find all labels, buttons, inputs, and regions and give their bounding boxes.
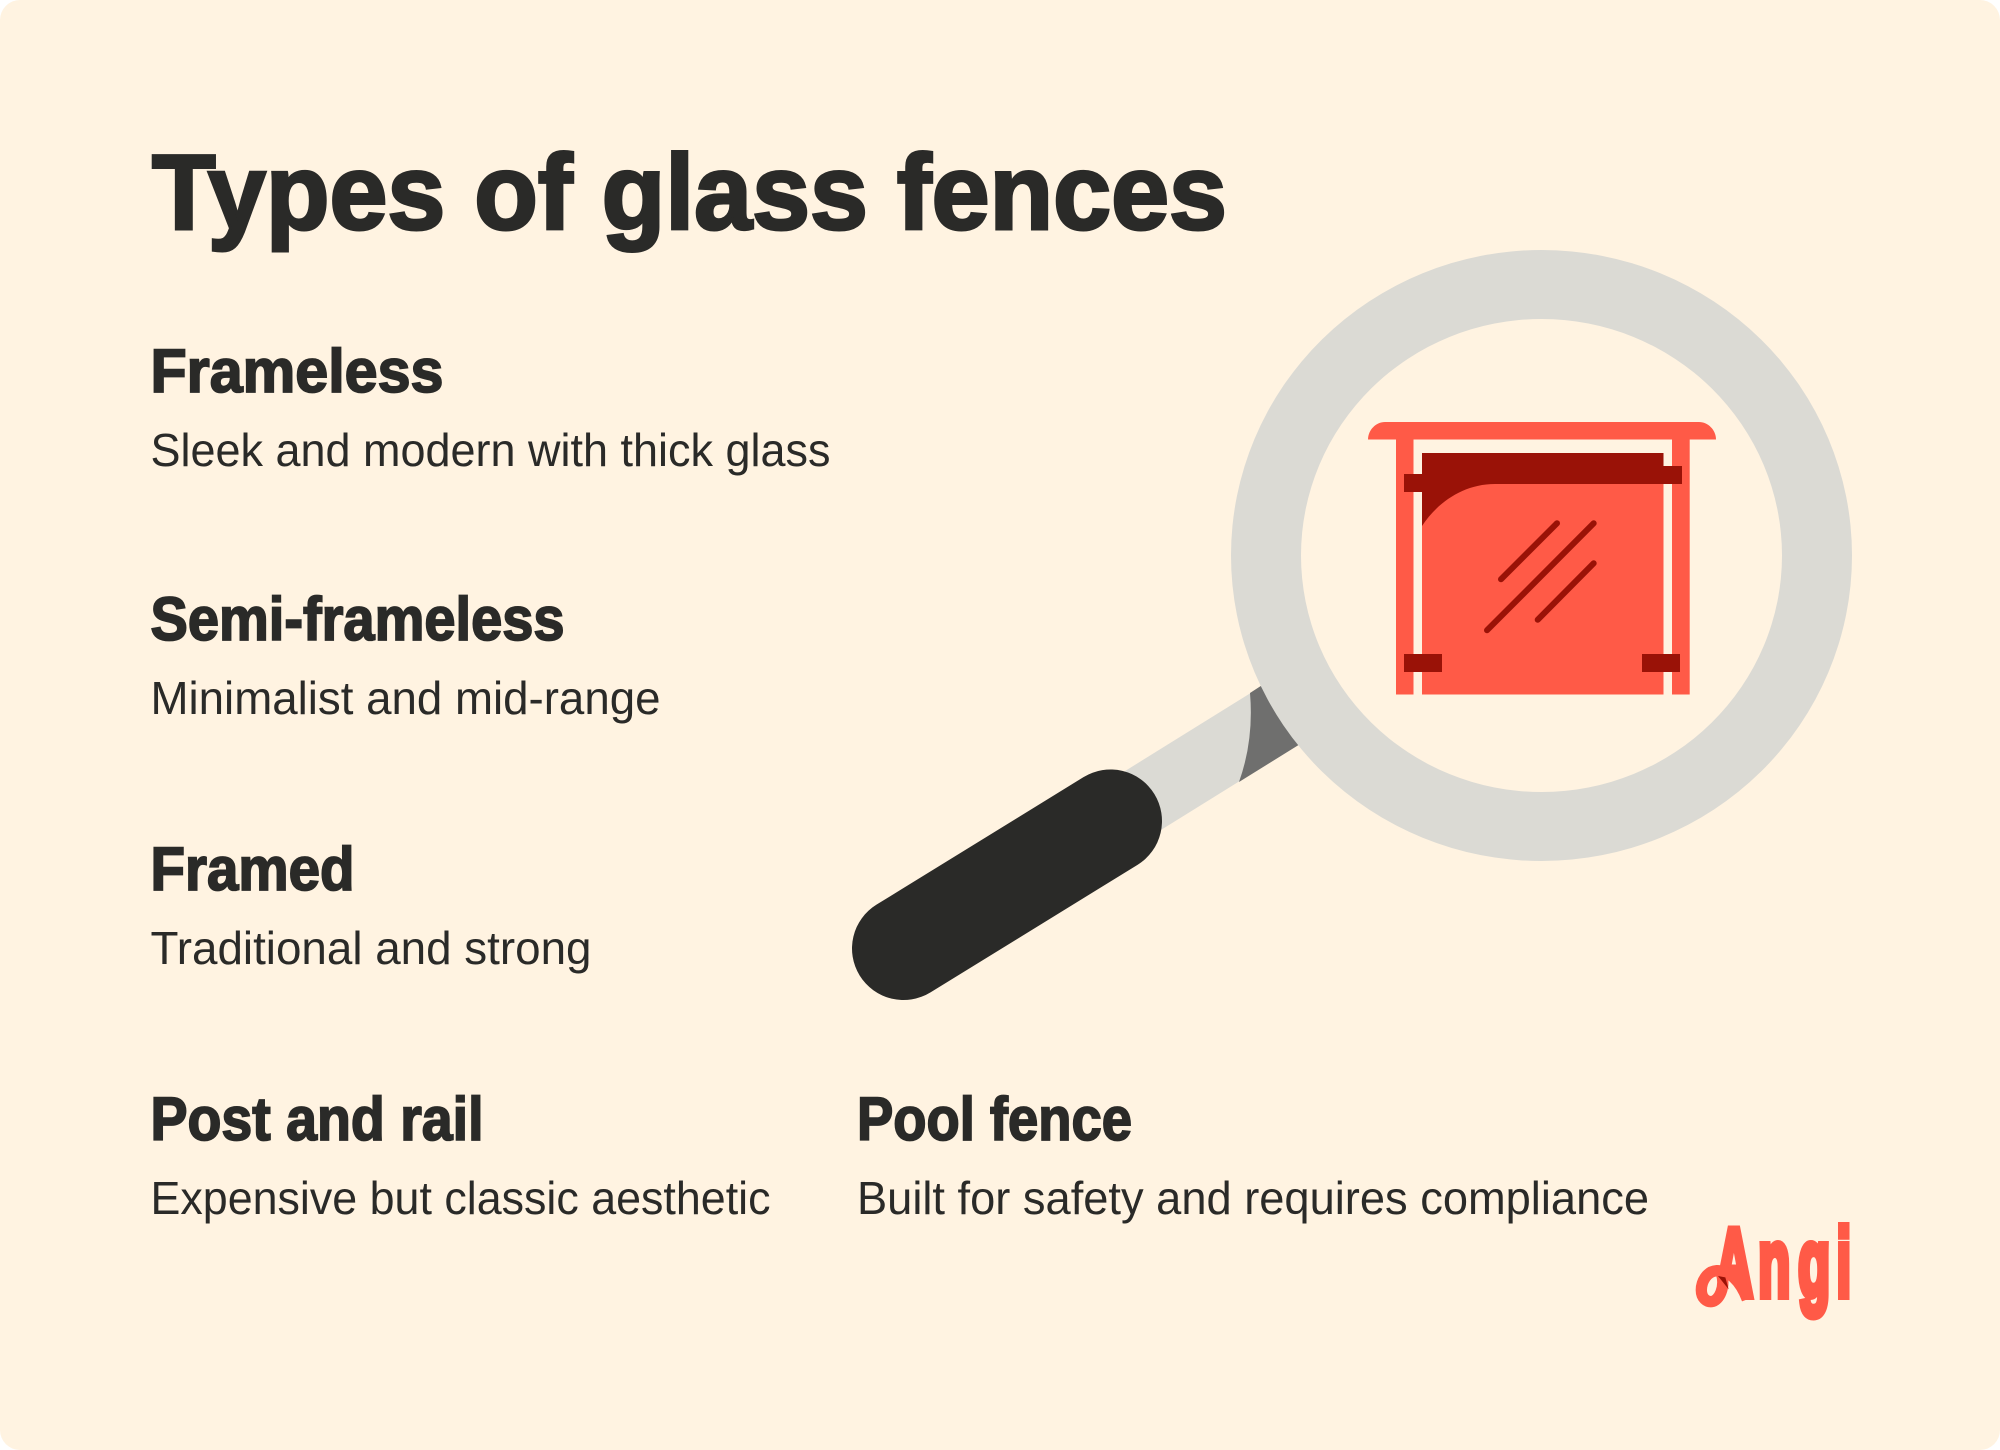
description: post and rail: Expensive but classic aesthetic [150, 1172, 770, 1224]
left post [1396, 439, 1414, 694]
magnifier lens opening [1301, 319, 1782, 792]
description: semi-frameless: Minimalist and mid-range [150, 672, 660, 724]
heading: post and rail: Post and rail [150, 1085, 484, 1153]
heading: pool fence: Pool fence [857, 1085, 1132, 1153]
item: semi-frameless [150, 585, 660, 724]
logo swash shadow [1718, 1276, 1729, 1289]
logo swash [1701, 1271, 1747, 1302]
description: framed: Traditional and strong [150, 922, 592, 974]
item: framed [150, 835, 592, 974]
logo wordmark: Angi [1715, 1208, 1851, 1317]
bottom right clip [1642, 654, 1680, 672]
heading: framed: Framed [150, 835, 354, 903]
glass reflection lines [1487, 523, 1594, 630]
magnifier lens ring [1231, 250, 1852, 861]
magnifier shaft [1110, 703, 1300, 821]
right post [1672, 439, 1690, 694]
top right clip [1663, 466, 1682, 484]
description: pool fence: Built for safety and requires compliance [857, 1172, 1649, 1224]
top rail [1368, 422, 1716, 440]
description: frameless: Sleek and modern with thick glass [150, 424, 830, 476]
heading: frameless: Frameless [150, 337, 444, 405]
icon: magnifying glass [904, 250, 1852, 948]
title: Types of glass fences [152, 132, 1227, 252]
magnifier handle [904, 821, 1110, 948]
logo leg mask [1710, 1274, 1742, 1310]
item: frameless [150, 337, 830, 476]
item: pool fence [857, 1085, 1649, 1224]
item: post and rail [150, 1085, 770, 1224]
magnifier shaft shadow [1239, 680, 1305, 782]
bottom left clip [1404, 654, 1442, 672]
top left clip [1404, 474, 1422, 492]
pane shadow [1422, 453, 1664, 526]
glass pane [1422, 453, 1664, 694]
icon: glass fence panel [1368, 422, 1716, 694]
heading: semi-frameless: Semi-frameless [150, 585, 564, 653]
logo: Angi [1701, 1208, 1851, 1317]
